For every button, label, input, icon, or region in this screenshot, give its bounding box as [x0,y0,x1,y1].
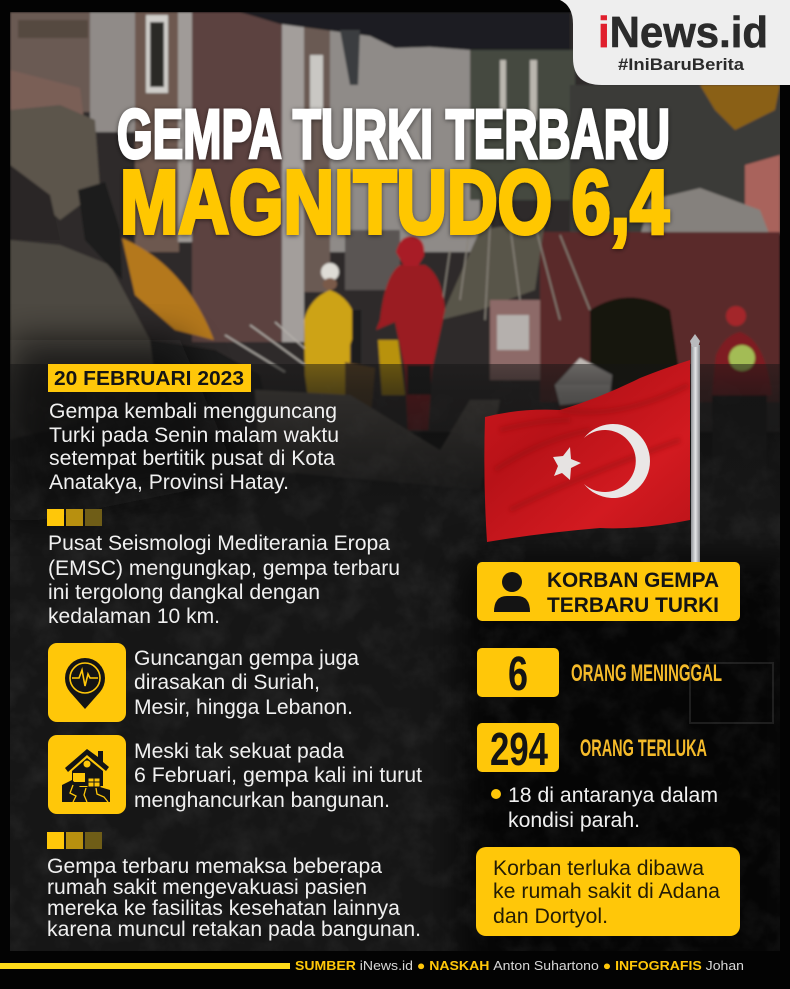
text block: intro: Turki pada Senin malam waktu [49,424,339,447]
text block: damage [134,740,422,812]
text block: EMSC: ini tergolong dangkal dengan [48,581,320,604]
flag pole [690,334,700,562]
rescue worker at right [712,306,772,490]
icon: Turkish flag [484,360,690,542]
logo panel: iNews.id: #IniBaruBerita [618,55,745,74]
text block: damage: 6 Februari, gempa kali ini turut [134,764,422,787]
text block: damage: menghancurkan bangunan. [134,789,390,812]
rescue worker in red suit [376,236,445,430]
stat: 294 injured: ORANG TERLUKA [580,735,707,762]
bullet note: 18 di antaranya dalam [508,784,718,807]
text block: intro: Gempa kembali mengguncang [49,400,337,423]
logo panel: iNews.id [560,0,790,85]
squares marker 2 [47,832,102,849]
heading: victims [477,562,740,621]
text block: EMSC: Pusat Seismologi Mediterania Eropa [48,532,390,555]
footer credits [0,958,744,973]
stat: 6 dead [477,648,722,701]
footer credits: SUMBER iNews.id ● NASKAH Anton Suhartono ● INFOGRAFIS Johan [295,958,744,973]
text block: hospitals: mereka ke fasilitas kesehatan lainnya [47,897,400,920]
text block: hospitals [47,855,421,941]
text block: hospitals: karena muncul retakan pada bangunan. [47,918,421,941]
title [117,95,670,253]
text block: hospitals: rumah sakit mengevakuasi pasien [47,876,367,899]
icon: person [494,572,530,612]
callout: hospitals: Korban terluka dibawa [493,857,704,880]
text block: EMSC: (EMSC) mengungkap, gempa terbaru [48,557,400,580]
rescue worker in yellow coat [304,263,405,397]
text block: felt in other countries: Mesir, hingga Lebanon. [134,696,353,719]
date badge: 20 FEBRUARI 2023 [54,368,244,390]
text block: intro: Anatakya, Provinsi Hatay. [49,471,289,494]
callout: hospitals [476,847,740,936]
logo panel: iNews.id: iNews.id [598,8,768,57]
heading: victims: KORBAN GEMPA [547,569,719,592]
text block: intro [49,400,339,494]
stat: 294 injured: 294 [490,723,548,775]
text block: felt in other countries: Guncangan gempa juga [134,647,359,670]
squares marker 1 [47,509,102,526]
text block: felt in other countries [134,647,359,719]
text block: EMSC [48,532,400,628]
text block: felt in other countries: dirasakan di Suriah, [134,671,320,694]
icon: seismic location pin [48,643,126,722]
callout: hospitals: ke rumah sakit di Adana [493,880,720,903]
icon: damaged house [48,735,126,814]
text block: hospitals: Gempa terbaru memaksa beberapa [47,855,382,878]
stat: 294 injured [477,723,707,775]
bullet note [491,784,718,832]
text block: damage: Meski tak sekuat pada [134,740,344,763]
text block: intro: setempat bertitik pusat di Kota [49,447,335,470]
stat: 6 dead: 6 [508,648,528,701]
text block: EMSC: kedalaman 10 km. [48,605,220,628]
bullet note: kondisi parah. [508,809,640,832]
heading: victims: TERBARU TURKI [547,594,719,617]
callout: hospitals: dan Dortyol. [493,905,608,928]
